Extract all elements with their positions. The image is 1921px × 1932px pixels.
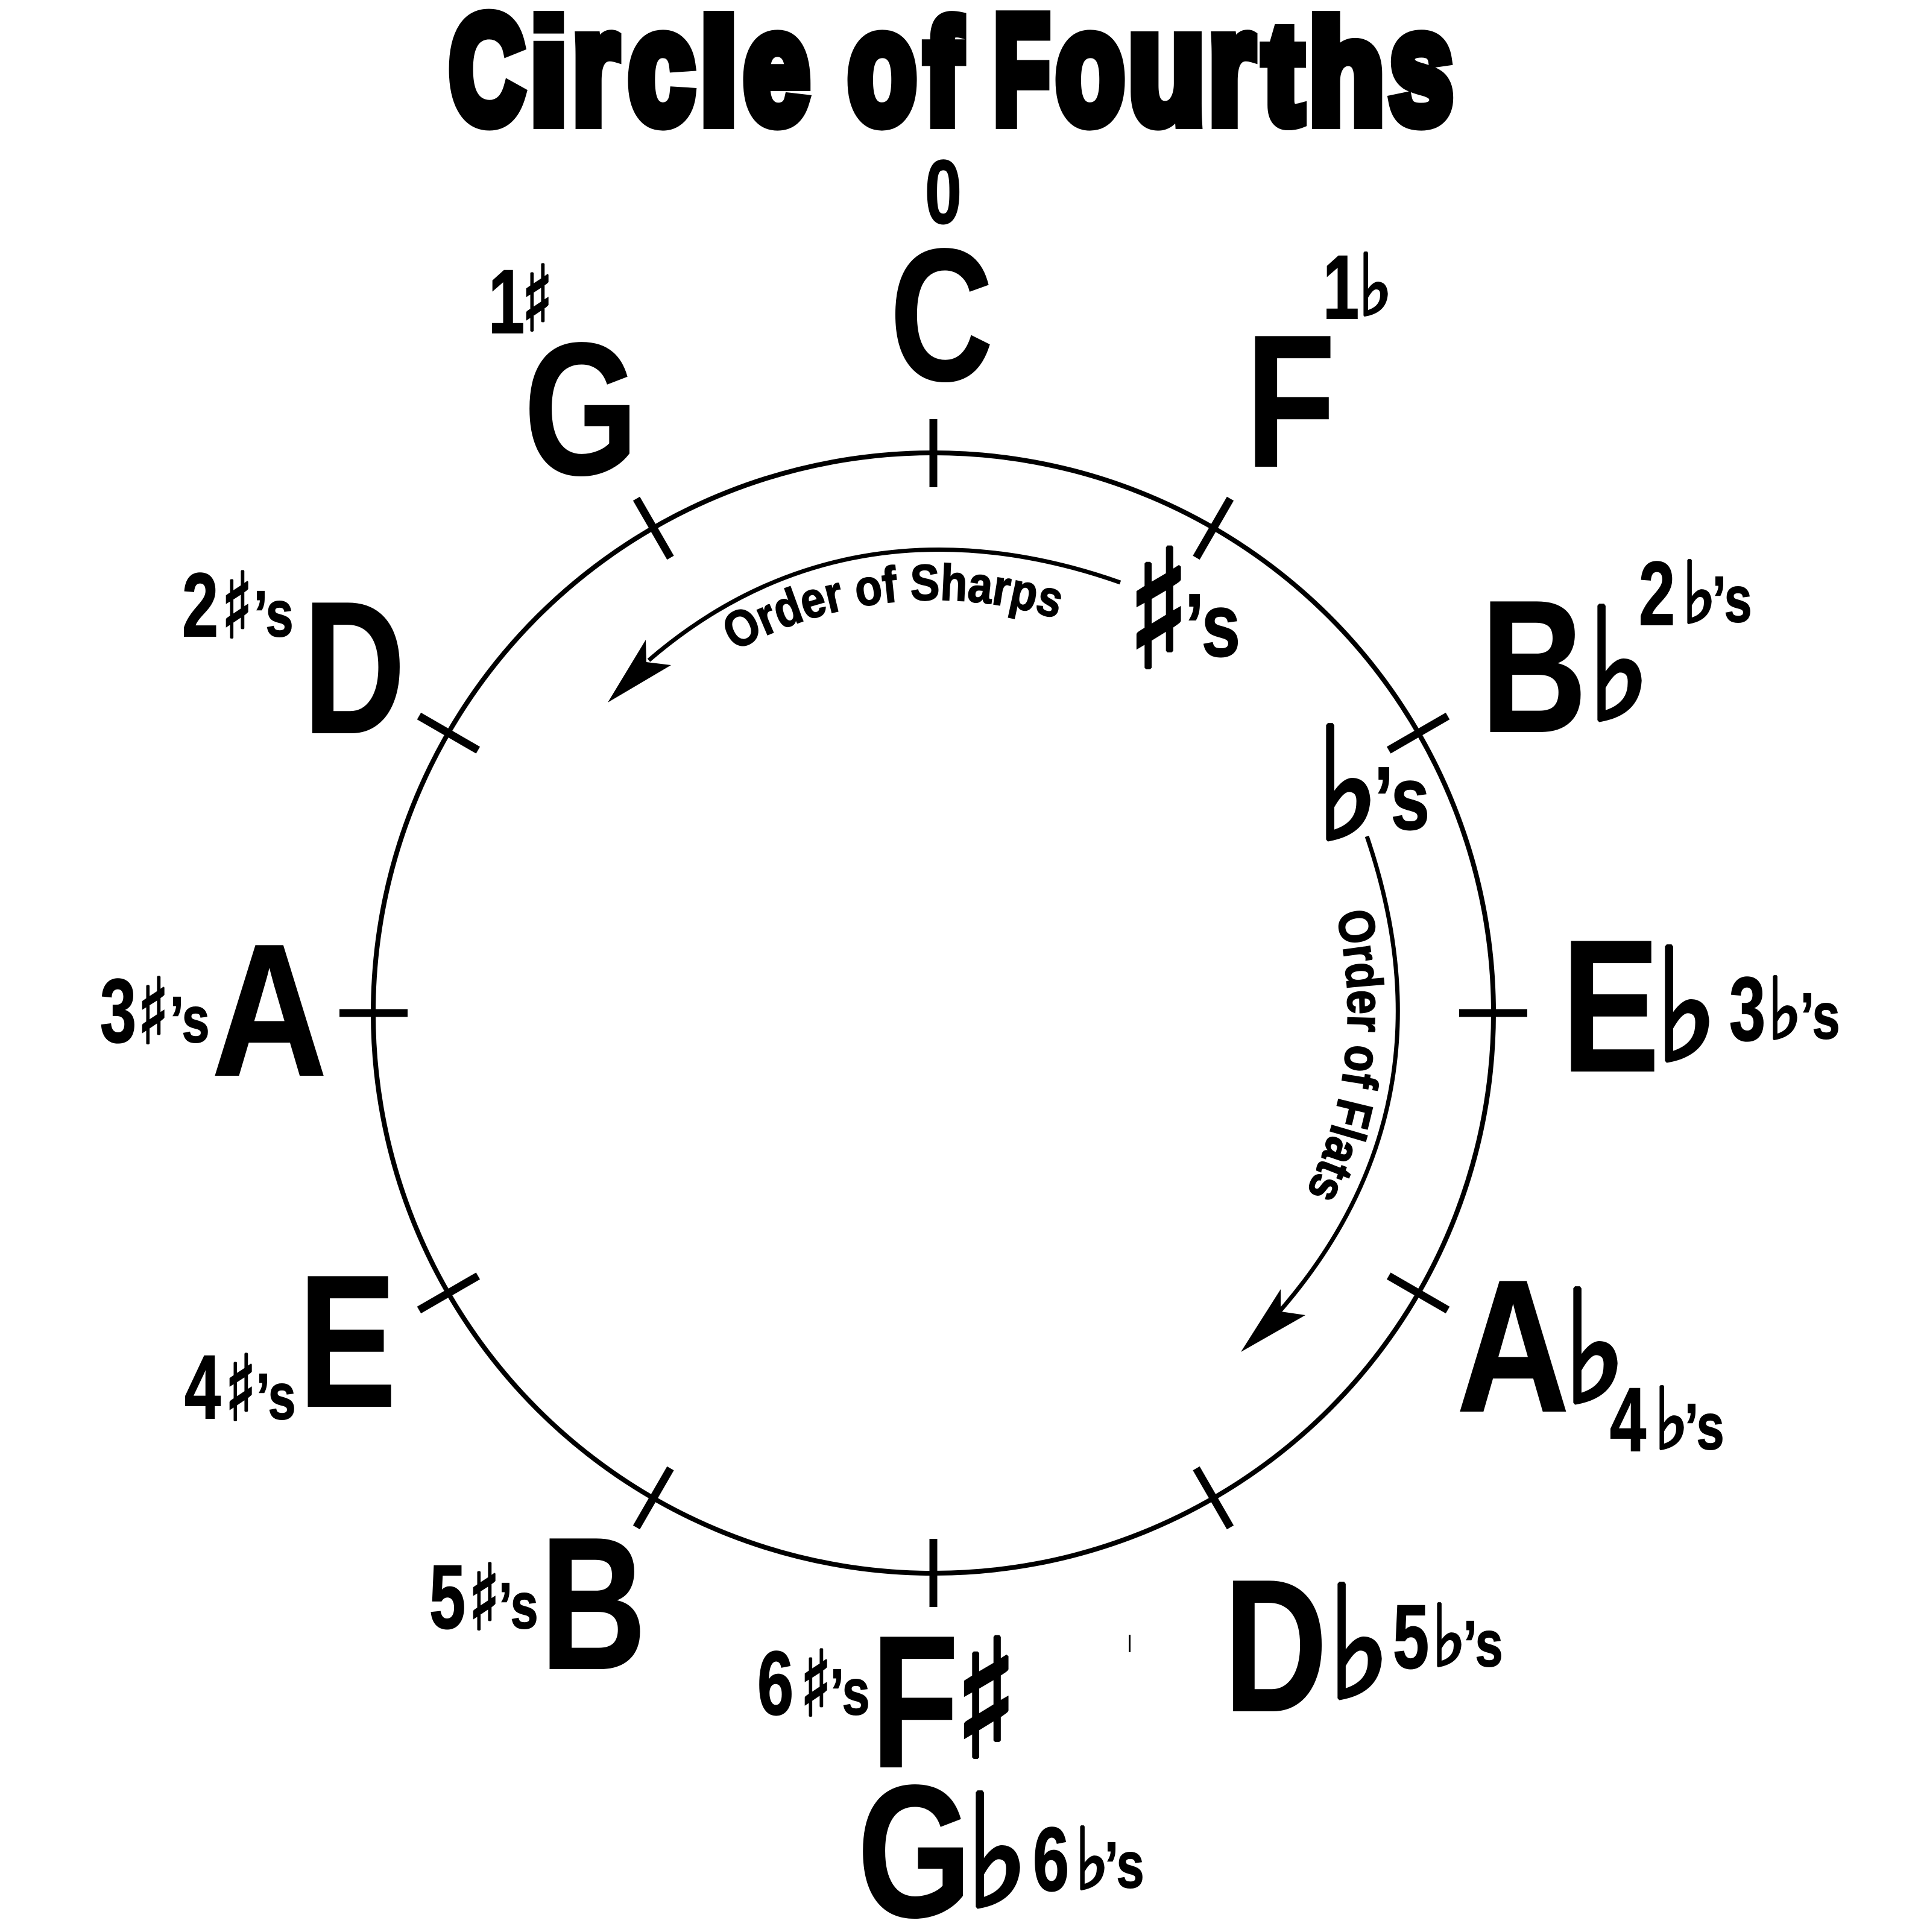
- label: sharps: [1128, 516, 1240, 706]
- key D with 2 sharps: ♯: [221, 554, 253, 659]
- arrow: order of sharps: Order of Sharps: [725, 562, 1061, 646]
- key B with 5 sharps: B: [540, 1499, 646, 1709]
- key D with 2 sharps: 2: [182, 555, 218, 655]
- key A flat with 4 flats: 4: [1610, 1369, 1646, 1470]
- key G flat with 6 flats: 6: [1033, 1809, 1069, 1910]
- arrow: order of sharps: [608, 548, 1121, 702]
- key F sharp with 6 sharps: ♯: [800, 1632, 831, 1737]
- key G with 1 sharp: [488, 247, 638, 514]
- key A flat with 4 flats: ♭: [1564, 1258, 1626, 1438]
- key A flat with 4 flats: A: [1457, 1240, 1569, 1451]
- title: t: [1264, 0, 1302, 153]
- label: flats: [1317, 695, 1430, 874]
- arrow: order of flats: [1241, 836, 1400, 1352]
- key E with 4 sharps: ’s: [256, 1360, 295, 1433]
- key B with 5 sharps: 5: [429, 1547, 465, 1647]
- key D flat with 5 flats: ’s: [1463, 1608, 1503, 1681]
- key A flat with 4 flats: ♭: [1654, 1370, 1688, 1468]
- key G flat with 6 flats: [857, 1747, 1144, 1932]
- key F sharp with 6 sharps: F: [871, 1596, 959, 1807]
- label: flats: ’s: [1374, 749, 1430, 848]
- key D flat with 5 flats: [1224, 1540, 1503, 1750]
- key E with 4 sharps: ♯: [225, 1336, 256, 1442]
- key G flat with 6 flats: ’s: [1105, 1829, 1144, 1902]
- key G flat with 6 flats: ♭: [1075, 1810, 1109, 1908]
- key B with 5 sharps: ’s: [499, 1570, 538, 1643]
- key F with 1 flat: ♭: [1358, 236, 1392, 335]
- key C with 0 accidentals: C: [890, 209, 993, 420]
- key A with 3 sharps: ’s: [170, 983, 209, 1056]
- arrow: order of flats: Order of Flats: [1308, 911, 1384, 1200]
- key F sharp with 6 sharps: ♯: [955, 1606, 1017, 1795]
- label: flats: ♭: [1317, 695, 1378, 874]
- key G with 1 sharp: ♯: [522, 247, 553, 352]
- key F sharp with 6 sharps: 6: [757, 1633, 793, 1734]
- label: sharps: ♯: [1128, 516, 1190, 706]
- key B with 5 sharps: ♯: [468, 1545, 500, 1651]
- key E flat with 3 flats: [1562, 901, 1840, 1111]
- key D with 2 sharps: D: [303, 563, 405, 773]
- circle with tick marks: [339, 419, 1527, 1607]
- key E with 4 sharps: [185, 1237, 396, 1447]
- key B flat with 2 flats: ’s: [1712, 563, 1752, 636]
- key D flat with 5 flats: ♭: [1432, 1587, 1466, 1685]
- key D with 2 sharps: [182, 554, 405, 773]
- stray mark: [1129, 1635, 1131, 1652]
- title: [449, 0, 1453, 159]
- key A flat with 4 flats: [1457, 1240, 1724, 1470]
- key G with 1 sharp: 1: [488, 251, 525, 352]
- key E flat with 3 flats: 3: [1729, 959, 1765, 1059]
- label: sharps: ’s: [1185, 576, 1240, 675]
- key E flat with 3 flats: ♭: [1656, 917, 1717, 1096]
- key F with 1 flat: 1: [1323, 237, 1359, 338]
- key B flat with 2 flats: 2: [1639, 543, 1675, 644]
- key C with 0 accidentals: 0: [925, 141, 962, 242]
- key D flat with 5 flats: 5: [1393, 1586, 1429, 1687]
- key B flat with 2 flats: [1481, 543, 1752, 772]
- key B flat with 2 flats: ♭: [1682, 544, 1716, 642]
- key F sharp with 6 sharps: [757, 1596, 1017, 1807]
- key F with 1 flat: [1246, 236, 1392, 507]
- key D flat with 5 flats: D: [1224, 1540, 1327, 1750]
- key G with 1 sharp: G: [524, 305, 638, 514]
- key E flat with 3 flats: ♭: [1768, 960, 1802, 1058]
- key A with 3 sharps: ♯: [137, 959, 169, 1065]
- key D flat with 5 flats: ♭: [1328, 1554, 1390, 1733]
- key A with 3 sharps: 3: [100, 961, 136, 1061]
- key A with 3 sharps: A: [212, 906, 327, 1116]
- key B flat with 2 flats: B: [1481, 562, 1587, 772]
- key F sharp with 6 sharps: ’s: [830, 1656, 869, 1729]
- key E with 4 sharps: 4: [185, 1337, 221, 1438]
- key E flat with 3 flats: ’s: [1800, 980, 1840, 1053]
- key A with 3 sharps: [100, 906, 327, 1116]
- key F with 1 flat: F: [1246, 297, 1336, 507]
- key A flat with 4 flats: ’s: [1685, 1391, 1724, 1463]
- key B with 5 sharps: [429, 1499, 646, 1709]
- key E with 4 sharps: E: [298, 1237, 396, 1447]
- key B flat with 2 flats: ♭: [1588, 576, 1650, 755]
- key D with 2 sharps: ’s: [254, 578, 293, 651]
- key E flat with 3 flats: E: [1562, 901, 1659, 1111]
